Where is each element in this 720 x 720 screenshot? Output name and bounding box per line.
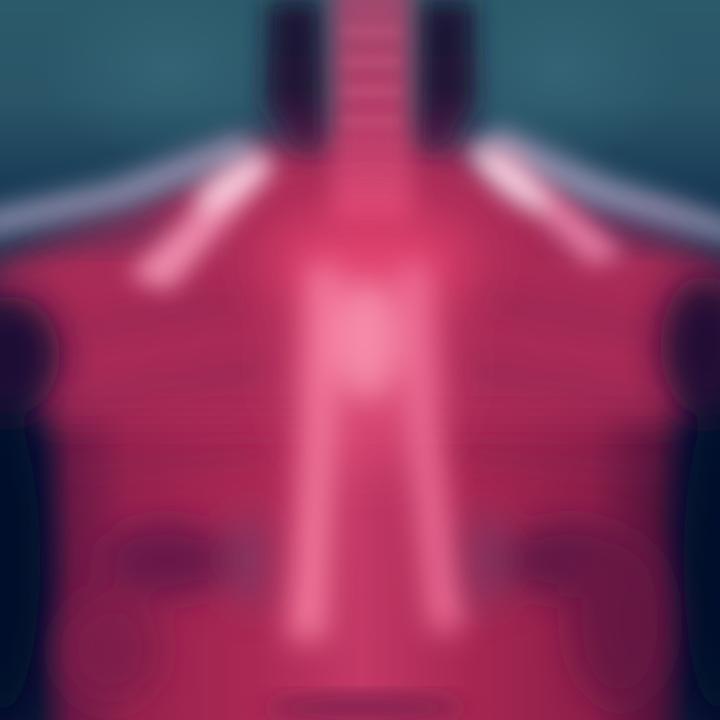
- background glow: lighter teal beside the neck: [40, 0, 680, 160]
- torso base: horizontal body tone: [0, 300, 720, 720]
- trachea rings: [342, 28, 400, 125]
- lower chest: darker rib shading: [60, 510, 670, 705]
- shoulders: pale lavender highlights: [0, 125, 720, 246]
- neck: dark side muscles and central windpipe: [265, 0, 476, 220]
- collarbones: bright pink-white bands: [128, 139, 625, 292]
- torso upper: blurred chest mass: [0, 140, 720, 420]
- upper chest glow: [260, 210, 480, 460]
- dark side shadows: arm gaps: [0, 275, 720, 715]
- abdomen: bottom centre dark notch: [265, 696, 465, 720]
- ribs: darker mottled streaks: [70, 300, 660, 470]
- sternum: central vertical light bands: [288, 265, 464, 640]
- shoulder shadows: muted band below the shoulders: [40, 209, 695, 244]
